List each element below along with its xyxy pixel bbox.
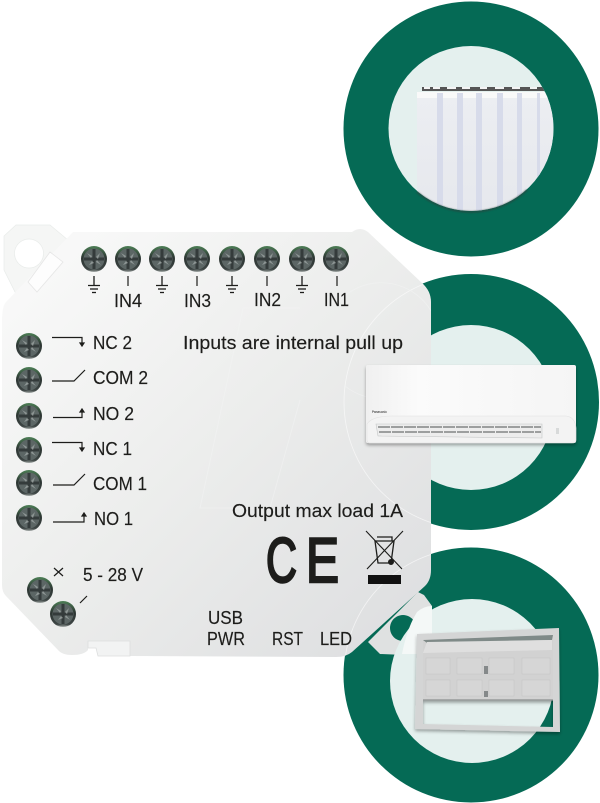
output load note: Output max load 1A — [232, 501, 403, 521]
CE mark — [266, 526, 339, 596]
port labels: RST — [272, 629, 303, 649]
bottom edge of door — [423, 699, 553, 701]
relay labels: COM 1 — [93, 474, 147, 494]
relay labels — [93, 333, 148, 529]
port labels: PWR — [207, 629, 245, 649]
door handles — [484, 666, 488, 697]
brand label: Panasonic — [372, 410, 387, 414]
panel: garage door circle — [344, 548, 598, 802]
top terminal screws — [81, 246, 349, 272]
mounting ear top left — [4, 225, 68, 302]
inner pale disc top — [388, 46, 554, 211]
relay labels: NC 1 — [93, 439, 132, 459]
power polarity marks — [54, 568, 87, 603]
air vent — [376, 424, 542, 438]
input labels: IN1 — [324, 290, 349, 310]
relay labels: COM 2 — [93, 368, 148, 388]
panel: curtain circle — [344, 2, 598, 256]
device mounting ear bottom right — [368, 592, 432, 655]
input tick marks — [128, 276, 337, 286]
faint watermark lines — [344, 284, 431, 656]
panel: air conditioner circle — [343, 274, 599, 530]
curtain bottom shadow — [417, 190, 527, 212]
top gap — [423, 635, 553, 643]
outer green ring bottom — [344, 548, 598, 802]
door frame — [415, 628, 560, 732]
relay labels: NC 2 — [93, 333, 132, 353]
port labels — [207, 608, 352, 649]
input labels: IN4 — [114, 291, 142, 311]
port labels: USB — [208, 608, 243, 628]
relay labels: NO 2 — [93, 404, 134, 424]
port labels: LED — [320, 629, 352, 649]
door leaf — [423, 636, 553, 700]
note: pull up: Inputs are internal pull up — [183, 333, 403, 353]
icon: crossed-out bin — [366, 531, 403, 584]
outer green ring top — [344, 2, 598, 256]
module body — [2, 229, 431, 657]
outer green ring middle — [343, 274, 599, 530]
tilted top section — [423, 640, 552, 653]
door panels — [426, 658, 550, 696]
strip curtain — [417, 87, 557, 214]
CE mark: E — [306, 526, 339, 596]
input labels: IN2 — [254, 290, 281, 310]
voltage label: 5 - 28 V — [83, 565, 143, 585]
curtain left edge shadow — [416, 94, 418, 190]
air conditioner unit — [366, 365, 576, 443]
ear seen through disc — [402, 606, 432, 654]
status light — [556, 428, 559, 434]
relay labels: NO 1 — [94, 509, 133, 529]
input labels: IN3 — [184, 291, 211, 311]
bottom notch — [88, 641, 130, 656]
panel: relay module — [2, 224, 431, 657]
hinge tab — [28, 252, 63, 292]
relay contact symbols — [52, 338, 86, 522]
left terminal screws — [16, 333, 42, 531]
lower fascia — [367, 416, 576, 443]
power terminal screws — [27, 577, 76, 627]
ground symbols — [88, 276, 308, 292]
input labels — [114, 290, 349, 311]
inner pale disc middle — [388, 325, 554, 490]
inner pale disc bottom — [390, 599, 554, 763]
CE mark: C — [266, 526, 297, 596]
garage door — [415, 628, 560, 732]
